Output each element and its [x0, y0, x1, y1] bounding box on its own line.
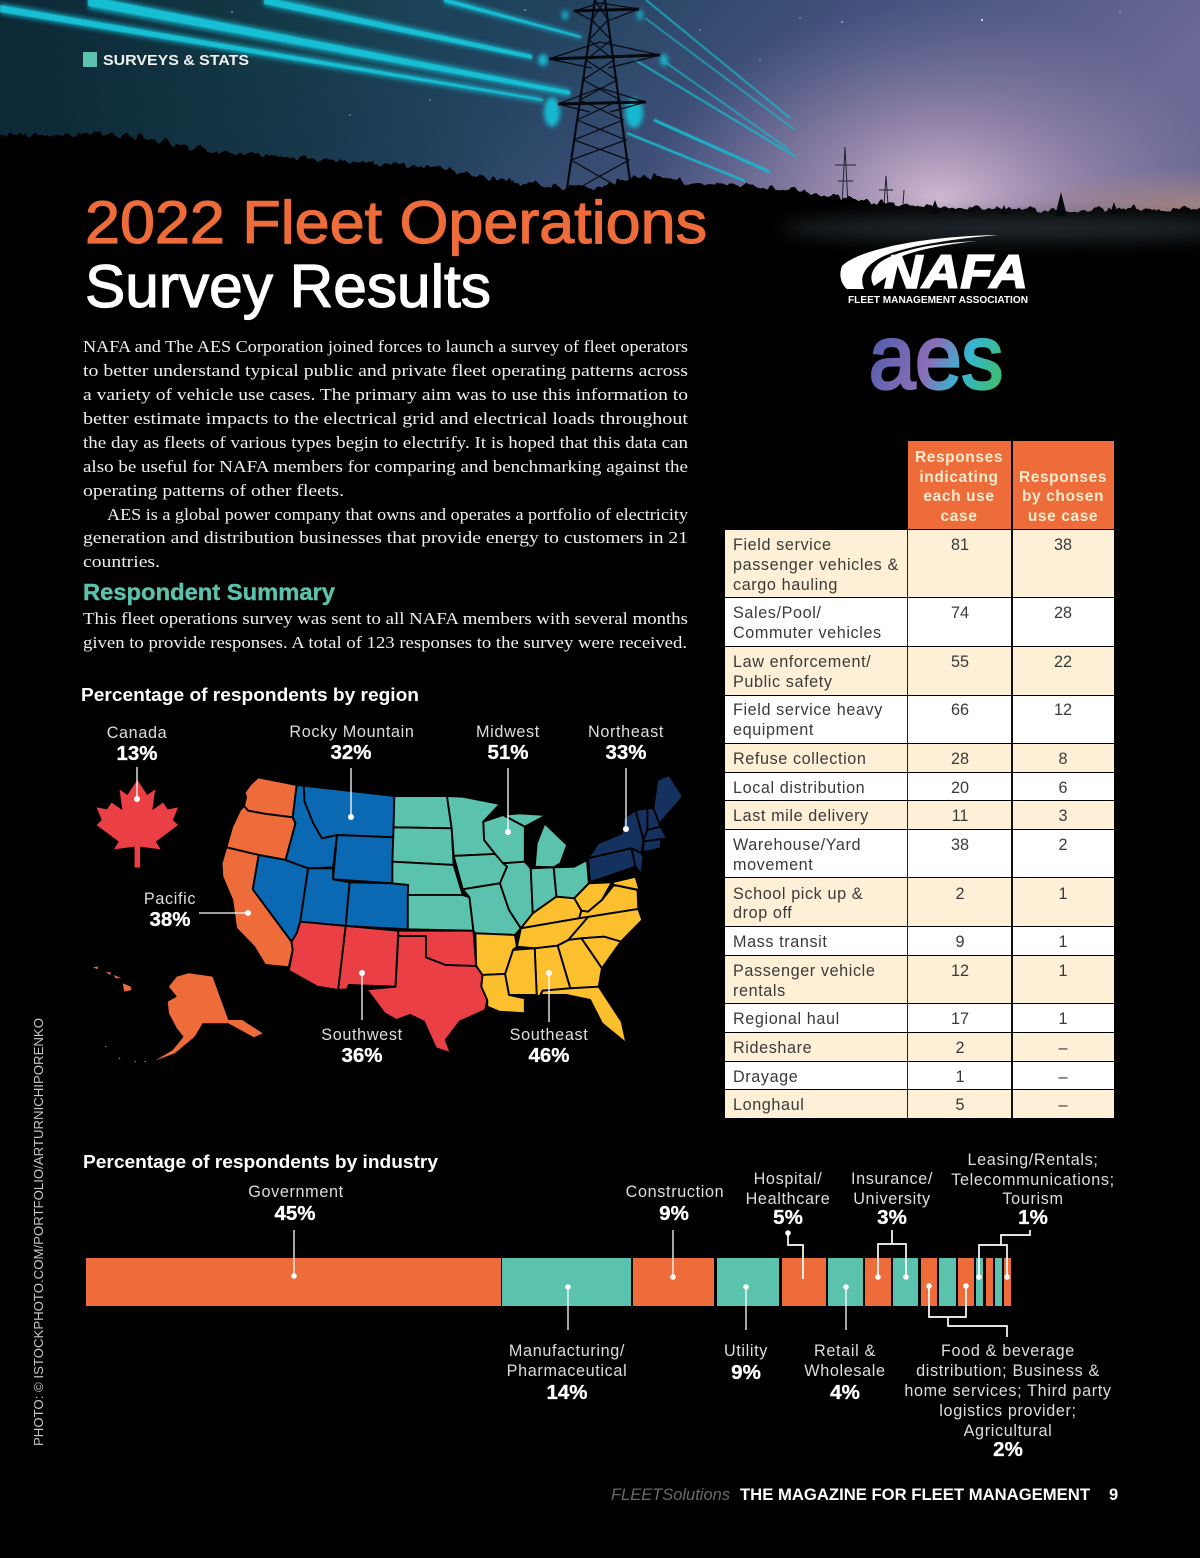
- label: Southeast: [510, 1026, 588, 1067]
- region: Northeast: [588, 775, 683, 882]
- label: Rocky Mountain: [289, 723, 415, 764]
- region: Southwest: [289, 922, 487, 1053]
- table header: use case: [1028, 508, 1098, 525]
- table rows: Refuse collection: [733, 750, 866, 768]
- label: Government: Government: [248, 1183, 344, 1201]
- table rows: 1: [1058, 1010, 1068, 1028]
- label: Pacific: [144, 890, 196, 931]
- table rows: 38: [951, 836, 969, 854]
- intro text: to better understand typical public and private fleet operating patterns across: [83, 361, 688, 380]
- table rows: 17: [951, 1010, 969, 1028]
- footer: FLEETSolutions: [611, 1485, 730, 1504]
- table rows: School pick up &: [733, 885, 863, 903]
- label: Rocky Mountain: Rocky Mountain: [289, 723, 415, 741]
- heading: respondent summary: Respondent Summary: [83, 579, 335, 605]
- table rows: Mass transit: [733, 933, 827, 951]
- label: Insurance/University: Insurance/: [851, 1170, 933, 1188]
- table rows: Law enforcement/: [733, 653, 871, 671]
- label: Northeast: [588, 723, 664, 764]
- table rows: 55: [951, 653, 969, 671]
- table rows: 81: [951, 536, 969, 554]
- label: Midwest: Midwest: [476, 723, 540, 741]
- region: Midwest: [392, 796, 589, 935]
- label: Canada: 13%: [116, 742, 158, 765]
- heading: industry chart: Percentage of respondents by industry: [83, 1152, 438, 1172]
- label: Manufacturing/Pharmaceutical: Pharmaceutical: [507, 1362, 627, 1380]
- label: Utility: 9%: [731, 1361, 761, 1384]
- table header: Responses: [915, 449, 1003, 466]
- intro text: [83, 337, 689, 571]
- label: Rocky Mountain: 32%: [330, 741, 372, 764]
- intro text: the day as fleets of various types begin to electrify. It is hoped that this data can: [83, 433, 689, 452]
- table rows: 2: [955, 885, 965, 903]
- table rows: 1: [1058, 962, 1068, 980]
- intro text: a variety of vehicle use cases. The primary aim was to use this information to: [83, 385, 688, 404]
- table rows: 1: [1058, 933, 1068, 951]
- label: Southwest: [321, 1026, 403, 1067]
- label: Food & beverage group: [904, 1342, 1112, 1461]
- summary text: [83, 609, 688, 652]
- label: Manufacturing/Pharmaceutical: Manufacturing/: [509, 1342, 625, 1360]
- label: Southeast: 46%: [528, 1044, 570, 1067]
- table rows: –: [1058, 1068, 1068, 1086]
- table rows: 9: [955, 933, 965, 951]
- label: Hospital/Healthcare: Healthcare: [746, 1190, 830, 1208]
- table rows: 38: [1054, 536, 1072, 554]
- table rows: Field service heavy: [733, 701, 883, 719]
- table rows: 11: [952, 807, 968, 825]
- table rows: movement: [733, 856, 813, 874]
- label: Utility: [724, 1342, 768, 1384]
- intro text: NAFA and The AES Corporation joined forces to launch a survey of fleet operators: [83, 337, 688, 356]
- label: Government: [248, 1183, 344, 1225]
- label: Hospital/Healthcare: [746, 1170, 830, 1229]
- region: Southeast: [475, 877, 642, 1043]
- table rows: 2: [955, 1039, 965, 1057]
- map: respondents by region: [93, 723, 683, 1067]
- table: responses by use case: [725, 441, 1114, 1118]
- label: Utility: Utility: [724, 1342, 768, 1360]
- table header: by chosen: [1022, 488, 1104, 505]
- table rows: 1: [1058, 885, 1068, 903]
- label: Leasing/Rentals: [951, 1151, 1115, 1229]
- table rows: 1: [955, 1068, 965, 1086]
- table rows: –: [1058, 1039, 1068, 1057]
- label: Leasing/Rentals: Tourism: [1002, 1190, 1064, 1208]
- label: Hospital/Healthcare: Hospital/: [754, 1170, 822, 1188]
- table rows: [725, 530, 1114, 1118]
- icon: maple leaf: [97, 780, 178, 868]
- table header: [908, 441, 1114, 529]
- title: Survey Results: [85, 253, 491, 320]
- table rows: 74: [951, 604, 969, 622]
- table rows: Commuter vehicles: [733, 624, 882, 642]
- label: Canada: Canada: [107, 724, 167, 742]
- label: Retail & Wholesale: [804, 1342, 886, 1404]
- label: Insurance/University: [851, 1170, 933, 1229]
- intro text: AES is a global power company that owns and operates a portfolio of electricity: [107, 505, 689, 524]
- table header: indicating: [919, 469, 999, 486]
- leader lines: [137, 767, 626, 1022]
- table header: each use: [923, 488, 995, 505]
- label: Retail & Wholesale: Retail &: [814, 1342, 876, 1360]
- label: Construction: 9%: [659, 1202, 689, 1225]
- label: Northeast: Northeast: [588, 723, 664, 741]
- intro text: also be useful for NAFA members for comparing and benchmarking against the: [83, 457, 688, 476]
- label: Southeast: Southeast: [510, 1026, 588, 1044]
- table rows: 20: [951, 779, 969, 797]
- table rows: 28: [951, 750, 969, 768]
- logo: AES: aes: [869, 308, 1003, 408]
- table rows: 5: [955, 1096, 965, 1114]
- table rows: drop off: [733, 904, 792, 922]
- label: Food & beverage group: 2%: [993, 1438, 1023, 1461]
- table rows: Rideshare: [733, 1039, 812, 1057]
- connector lines: [291, 1230, 1030, 1337]
- label: Food & beverage group: home services; Third party: [904, 1382, 1112, 1400]
- table rows: 6: [1058, 779, 1068, 797]
- label: Leasing/Rentals: Telecommunications;: [951, 1171, 1115, 1189]
- table rows: 28: [1054, 604, 1072, 622]
- label: Government: 45%: [274, 1202, 316, 1225]
- label: Retail & Wholesale: 4%: [830, 1381, 860, 1404]
- bar chart: respondents by industry: [86, 1151, 1115, 1461]
- label: Midwest: [476, 723, 540, 764]
- table rows: 12: [1054, 701, 1072, 719]
- table rows: equipment: [733, 721, 814, 739]
- label: Leasing/Rentals: Leasing/Rentals;: [968, 1151, 1098, 1169]
- footer: 9: [1109, 1486, 1118, 1504]
- region: Rocky Mountain: [253, 785, 408, 942]
- label: Food & beverage group: distribution; Business &: [916, 1362, 1100, 1380]
- bar segments: [86, 1258, 1011, 1306]
- table rows: –: [1058, 1096, 1068, 1114]
- logo: NAFA: [840, 235, 1028, 306]
- label: Leasing/Rentals: 1%: [1018, 1206, 1048, 1229]
- table rows: 3: [1058, 807, 1068, 825]
- label: Midwest: 51%: [487, 741, 529, 764]
- label: Pacific: Pacific: [144, 890, 196, 908]
- logo: NAFA: NAFA: [884, 245, 1028, 298]
- photo: transmission tower at night: [0, 0, 1200, 280]
- table rows: 22: [1054, 653, 1072, 671]
- label: Canada: [107, 724, 167, 765]
- label: Food & beverage group: Food & beverage: [941, 1342, 1075, 1360]
- table rows: Last mile delivery: [733, 807, 869, 825]
- logo: NAFA: FLEET MANAGEMENT ASSOCIATION: [848, 294, 1028, 306]
- label: Northeast: 33%: [605, 741, 647, 764]
- label: Food & beverage group: Agricultural: [964, 1422, 1052, 1440]
- label: Retail & Wholesale: Wholesale: [804, 1362, 886, 1380]
- label: Manufacturing/Pharmaceutical: [507, 1342, 627, 1404]
- table rows: Regional haul: [733, 1010, 840, 1028]
- region: Pacific: [93, 777, 297, 1062]
- table rows: Local distribution: [733, 779, 865, 797]
- table rows: 8: [1058, 750, 1068, 768]
- table rows: cargo hauling: [733, 576, 838, 594]
- footer: [611, 1485, 1118, 1504]
- table rows: Warehouse/Yard: [733, 836, 861, 854]
- table header: case: [941, 508, 977, 525]
- heading: region chart: Percentage of respondents by region: [81, 685, 419, 705]
- table rows: rentals: [733, 982, 786, 1000]
- label: Construction: [626, 1183, 724, 1225]
- table rows: passenger vehicles &: [733, 556, 899, 574]
- summary text: This fleet operations survey was sent to all NAFA members with several months: [83, 609, 688, 628]
- table rows: 66: [951, 701, 969, 719]
- label: Southwest: 36%: [341, 1044, 383, 1067]
- table rows: Longhaul: [733, 1096, 804, 1114]
- table rows: Passenger vehicle: [733, 962, 875, 980]
- table rows: Sales/Pool/: [733, 604, 822, 622]
- table rows: 12: [951, 962, 969, 980]
- label: Construction: Construction: [626, 1183, 724, 1201]
- photo credit: PHOTO: © ISTOCKPHOTO.COM/PORTFOLIO/ARTURNICHIPORENKO: [32, 1018, 46, 1446]
- title: 2022 Fleet Operations: [85, 189, 707, 256]
- footer: THE MAGAZINE FOR FLEET MANAGEMENT: [740, 1486, 1090, 1504]
- summary text: given to provide responses. A total of 123 responses to the survey were received.: [83, 633, 687, 652]
- label: Pacific: 38%: [149, 908, 191, 931]
- intro text: countries.: [83, 552, 160, 571]
- label: Food & beverage group: logistics provider;: [939, 1402, 1077, 1420]
- table rows: 2: [1058, 836, 1068, 854]
- table header: Responses: [1019, 469, 1107, 486]
- intro text: better estimate impacts to the electrical grid and electrical loads throughout: [83, 409, 688, 428]
- table rows: Field service: [733, 536, 832, 554]
- section tag: SURVEYS & STATS: [103, 52, 249, 69]
- label: Southwest: Southwest: [321, 1026, 403, 1044]
- table rows: Public safety: [733, 673, 833, 691]
- title: [85, 189, 707, 320]
- intro text: generation and distribution businesses that provide energy to customers in 21: [83, 528, 688, 547]
- table rows: Drayage: [733, 1068, 798, 1086]
- label: Manufacturing/Pharmaceutical: 14%: [546, 1381, 588, 1404]
- intro text: operating patterns of other fleets.: [83, 481, 344, 500]
- label: Insurance/University: University: [853, 1190, 931, 1208]
- label: Insurance/University: 3%: [877, 1206, 907, 1229]
- label: Hospital/Healthcare: 5%: [773, 1206, 803, 1229]
